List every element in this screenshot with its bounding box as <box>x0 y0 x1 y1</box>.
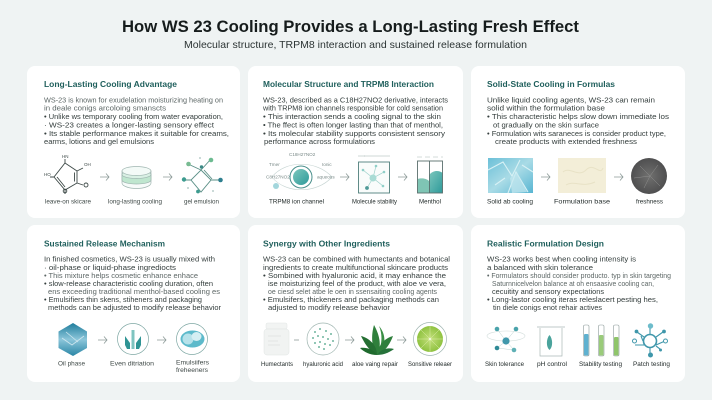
icon: TRPM8 ion channel diagram: aqueous <box>317 174 335 180</box>
arrow <box>614 174 623 180</box>
icon: pH control beaker <box>537 327 565 356</box>
arrow <box>157 336 166 344</box>
caption labels: Patch testing <box>633 361 670 368</box>
icon: hyaluronic acid dish <box>307 323 339 355</box>
body text <box>487 96 669 146</box>
body text <box>262 96 448 146</box>
icon: ring molecule: HO <box>44 172 51 177</box>
arrow <box>100 174 109 180</box>
icon: TRPM8 ion channel diagram: C8H27NO2 <box>266 174 290 180</box>
caption labels: freshness <box>636 198 663 206</box>
subtitle: Molecular structure, TRPM8 interaction and sustained release formulation <box>184 40 527 51</box>
body text: • Formulation wits saraneces is consider product type, <box>487 130 666 138</box>
body text: WS-23 can be combined with humectants and botanical <box>263 256 450 264</box>
body text <box>263 256 450 312</box>
panel: long-lasting cooling advantage <box>27 66 240 218</box>
caption labels <box>487 198 663 206</box>
heading: Long-Lasting Cooling Advantage <box>44 79 177 89</box>
body text: • Unlike ws temporary cooling from water evaporation, <box>44 113 223 121</box>
arrow <box>541 174 550 180</box>
caption labels: Sonsitive releaer <box>408 361 453 368</box>
body text: Unlike liquid cooling agents, WS-23 can remain <box>487 96 655 104</box>
body text: performance across formulations <box>264 138 375 146</box>
body text: • Emulsifers, thickeners and packaging methods can <box>263 296 439 304</box>
arrow <box>345 336 354 344</box>
caption labels: gel emulsion <box>184 198 220 206</box>
body text: methods can be adjusted to modify release behavior <box>48 304 222 312</box>
body text: • Sombined with hyaluronic acid, it may enhance the <box>263 272 446 280</box>
heading: Molecular Structure and TRPM8 Interaction <box>263 79 434 89</box>
caption labels: TRPM8 ion channel <box>269 198 324 206</box>
body text: • Its molecular stability supports consistent sensory <box>263 130 445 138</box>
caption labels <box>45 198 220 206</box>
arrow <box>398 174 407 180</box>
icon: oil phase hexagon <box>58 323 87 356</box>
icon: aloe vera plant <box>360 325 394 355</box>
caption labels: leave-on skicare <box>45 198 92 206</box>
arrow <box>397 336 406 344</box>
body text: • Formulators should consider producto. typ in skin targeting <box>487 272 671 280</box>
caption labels: aloe vaing repair <box>352 361 399 368</box>
icon: humectant jar <box>264 323 289 355</box>
body text: • Emulsifiers thin skens, stiheners and packaging <box>44 296 202 304</box>
caption labels: freheeners <box>176 367 208 374</box>
heading: Sustained Release Mechanism <box>44 238 165 248</box>
caption labels: Emulsiifers <box>176 360 209 366</box>
caption labels: Molecule stability <box>352 198 398 206</box>
heading: Solid-State Cooling in Formulas <box>487 79 615 89</box>
image: freshness stone disc <box>631 158 667 194</box>
panel: synergy with other ingredients <box>248 225 463 382</box>
body text: In finished cosmetics, WS-23 is usually mixed with <box>44 256 215 264</box>
arrow <box>98 336 107 344</box>
image: solid ice texture <box>488 158 533 193</box>
body text: • This characteristic helps slow down immediate los <box>487 113 669 121</box>
icon: TRPM8 ion channel diagram: Tmer <box>269 162 280 167</box>
body text: Saturnnicelvelon balance at oh ensaasive cooling can, <box>492 280 654 288</box>
body text: create products with extended freshness <box>495 138 637 146</box>
body text: · oil-phase or liquid-phase ingrediocts <box>44 264 176 272</box>
icon: molecule stability square <box>358 156 390 193</box>
body text: • The ffect is often longer lasting than that of menthol, <box>263 122 443 130</box>
panel: realistic formulation design <box>471 225 685 382</box>
icon: stability test tubes <box>584 325 619 356</box>
icon: TRPM8 ion channel diagram <box>266 152 335 190</box>
icon: layered cylinder <box>122 166 151 188</box>
body text: cecuitity and sensory expectations <box>492 288 604 296</box>
body text <box>44 256 222 312</box>
caption labels <box>269 198 441 206</box>
caption labels: long-lasting cooling <box>108 198 163 206</box>
icon: emulsifier droplets circle <box>176 324 208 354</box>
body text: • slow-release characteristic cooling duration, often <box>44 280 213 288</box>
caption labels: Menthol <box>419 198 441 206</box>
caption labels <box>485 361 670 368</box>
image: formulation base swatch <box>558 158 606 193</box>
arrow <box>340 174 349 180</box>
body text: with TRPM8 ion channels responsible for cold sensation <box>262 105 443 113</box>
body text: ise moisturizing feel of the product, with aloe ve vera, <box>268 280 446 288</box>
panel: molecular structure and TRPM8 <box>248 66 463 218</box>
caption labels: Even ditriation <box>110 360 155 368</box>
body text: solid within the formulation base <box>487 105 605 113</box>
body text: ens exceeding traditional menthol-based cooling es <box>48 288 220 296</box>
chart: menthol comparison bars <box>417 157 443 193</box>
body text: ingredients to create multifunctional skincare products <box>263 264 448 272</box>
icon: skin tolerance molecules <box>487 327 525 352</box>
caption labels <box>261 361 453 368</box>
icon: patch testing network <box>632 323 668 358</box>
body text <box>487 256 671 312</box>
panel: solid-state cooling <box>471 66 685 218</box>
body text: WS-23, described as a C18H27NO2 derivative, interacts <box>263 96 448 104</box>
caption labels: pH control <box>537 361 567 368</box>
body text: in deale conigs arcoloing smanscts <box>44 105 166 113</box>
body text: ot gradually on the skin surface <box>493 122 599 130</box>
dash connector <box>294 339 299 341</box>
caption labels: Stability testing <box>579 361 622 368</box>
caption labels: Oil phase <box>58 360 86 368</box>
icon: TRPM8 ion channel diagram: C18H27NO2 <box>289 152 316 157</box>
body text: • This mixture helps cosmetic enhance enhace <box>44 272 198 280</box>
caption labels: Humectants <box>261 361 293 368</box>
icon: TRPM8 ion channel diagram: Ionic <box>322 162 332 167</box>
body text: adjusted to modify release behavior <box>268 304 391 312</box>
icon: even distribution circle <box>118 324 148 354</box>
arrow <box>163 174 172 180</box>
caption labels: Formulation base <box>554 198 611 206</box>
icon: ring molecule <box>44 154 91 194</box>
heading: Synergy with Other Ingredients <box>263 238 390 248</box>
body text: WS-23 works best when cooling intensity is <box>487 256 636 264</box>
body text: • This interaction sends a cooling signal to the skin <box>263 113 441 121</box>
body text: oe ciesd selet atbe le oen in ssensaiting cooling agents <box>268 288 437 296</box>
caption labels <box>58 360 209 374</box>
icon: ring molecule: OH <box>84 162 91 167</box>
title: How WS 23 Cooling Provides a Long-Lasting Fresh Effect <box>122 17 579 36</box>
body text: tin diele conigs enot rehair actives <box>493 304 602 312</box>
icon: lime slice <box>414 322 446 356</box>
caption labels: Skin tolerance <box>485 361 524 368</box>
body text: earms, lotions and gel emulsions <box>44 138 154 146</box>
body text: WS-23 is known for exudelation moisturizing heating on <box>44 96 223 104</box>
icon: ring molecule: HN <box>62 154 68 159</box>
heading: Realistic Formulation Design <box>487 238 604 248</box>
panel: sustained release mechanism <box>27 225 240 382</box>
body text: • Its stable performance makes it suitable for creams, <box>44 130 229 138</box>
body text: • Long-lastor cooling iteras releslacert pesting hes, <box>487 296 658 304</box>
caption labels: Solid ab cooling <box>487 198 533 206</box>
caption labels: hyaluronic acid <box>303 361 343 368</box>
icon: emulsion molecule <box>182 157 223 193</box>
body text <box>44 96 229 146</box>
body text: a balanced with skin tolerance <box>487 264 593 272</box>
body text: · WS-23 creates a longer-lasting sensory effect <box>44 122 214 130</box>
